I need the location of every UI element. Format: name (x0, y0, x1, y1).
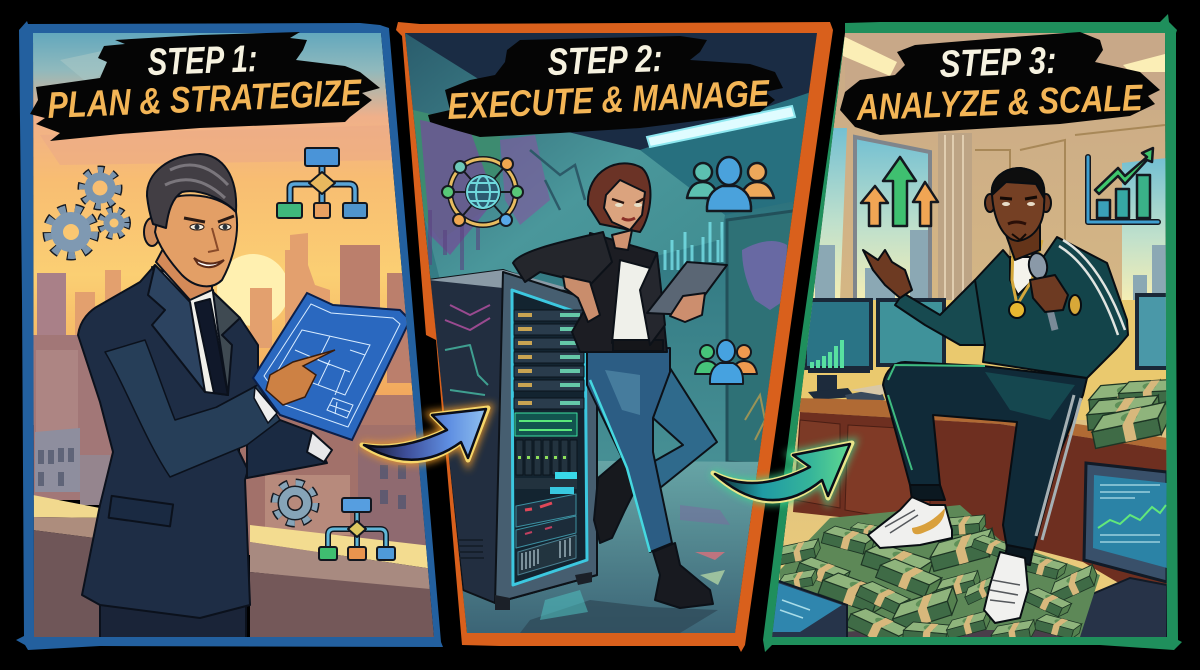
man in green tracksuit (863, 168, 1128, 623)
icon: globe network (442, 158, 523, 226)
orange sketched frame (396, 22, 833, 652)
server room scene (400, 30, 825, 640)
woman in leather jacket (513, 163, 727, 608)
office scene (770, 30, 1181, 652)
heading text step 1 (47, 38, 363, 126)
icon: three up arrows (861, 157, 938, 226)
holographic data bars (665, 222, 722, 270)
icon: gears (48, 171, 126, 255)
heading text step 2: STEP 2: (547, 38, 663, 84)
heading text step 1: PLAN & STRATEGIZE (47, 72, 363, 126)
blueprint held by businessman (253, 293, 410, 440)
heading brush stroke (30, 32, 380, 141)
icon: single gear (276, 484, 314, 522)
icon: team of three (687, 157, 774, 211)
heading text step 1: STEP 1: (147, 38, 258, 84)
heading text step 3 (855, 40, 1144, 128)
heading brush stroke (840, 32, 1160, 135)
arrow: step 2 to step 3 (713, 443, 852, 501)
panel: step 1 plan and strategize (16, 21, 443, 650)
wooden desk (793, 398, 1167, 600)
heading text step 2 (447, 38, 771, 127)
box with screen lower left (770, 580, 847, 640)
heading text step 3: STEP 3: (939, 40, 1057, 86)
heading brush stroke (428, 36, 783, 137)
heading text step 2: EXECUTE & MANAGE (447, 72, 771, 127)
heading text step 3: ANALYZE & SCALE (855, 77, 1144, 128)
monitors on the desk (805, 295, 1169, 406)
icon: flowchart top (277, 148, 367, 218)
blue sketched frame (16, 21, 443, 650)
small monitor lower right (1078, 463, 1167, 640)
green sketched frame (763, 14, 1182, 652)
cash stack on desk (1086, 378, 1166, 450)
icon: team small (695, 340, 757, 384)
panel: step 3 analyze and scale (763, 14, 1182, 652)
arrow: step 1 to step 2 (362, 408, 488, 461)
panel: step 2 execute and manage (396, 22, 833, 652)
ceiling light (647, 106, 795, 147)
rooftop city scene at sunset (30, 30, 440, 640)
businessman in suit (78, 154, 332, 640)
money pile (778, 505, 1100, 637)
server rack (428, 270, 597, 610)
icon: flowchart lower (319, 498, 395, 560)
icon: growth chart (1088, 148, 1158, 222)
